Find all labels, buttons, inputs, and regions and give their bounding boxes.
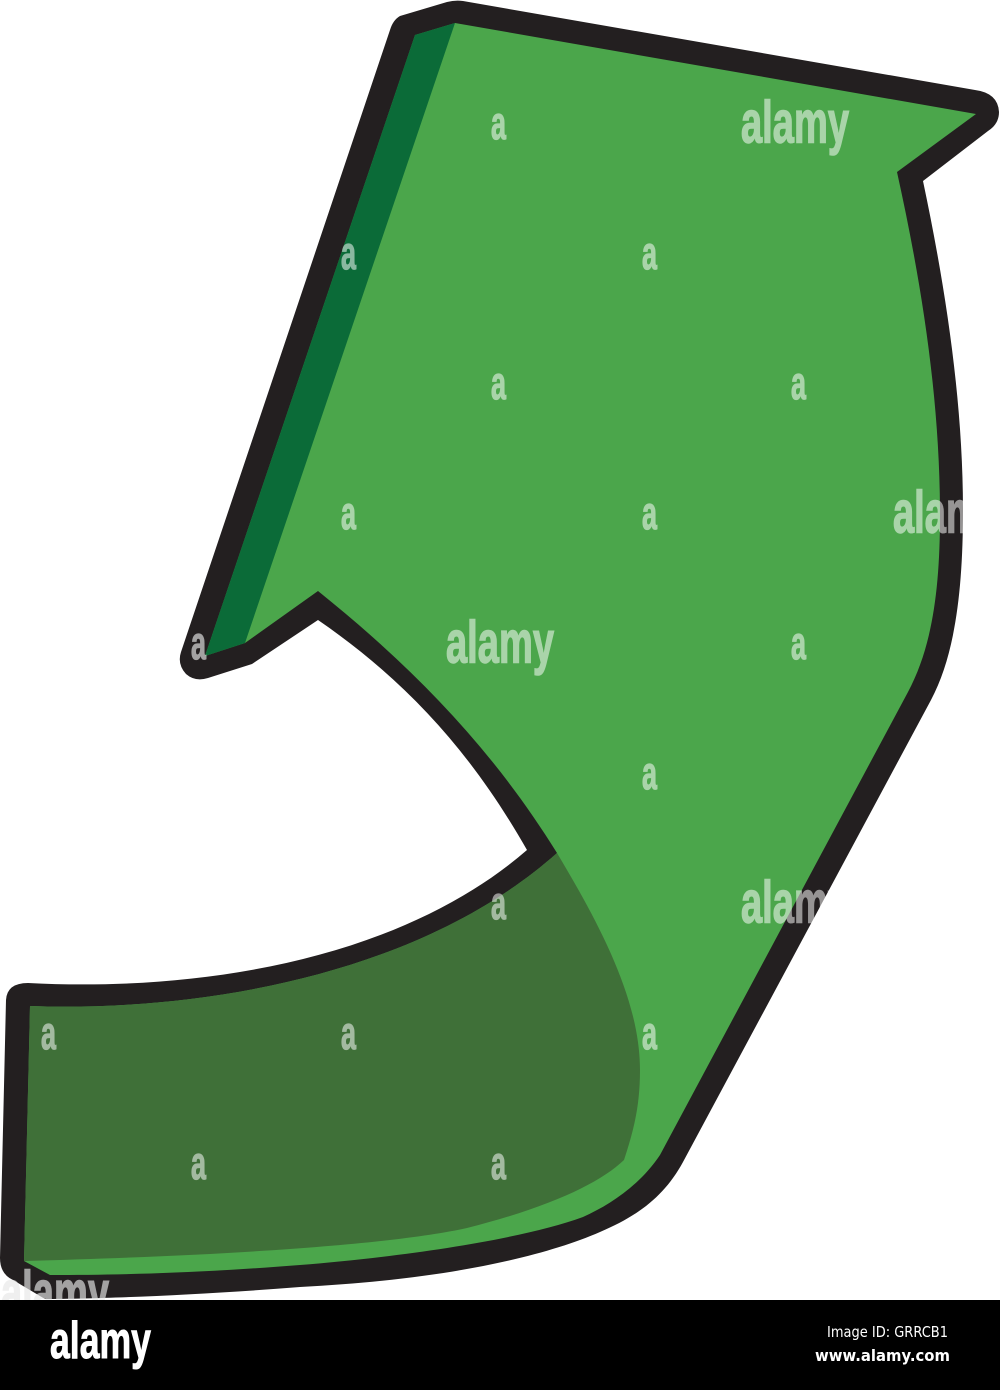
watermark: alamy text repeated: alamy [1,1260,109,1326]
watermark: small a marks: a [191,617,206,669]
footer image id: Image ID: GRRCB1 [827,1323,948,1341]
watermark: small a marks: a [791,357,806,409]
watermark: small a marks: a [642,227,657,279]
watermark: small a marks: a [491,97,506,149]
watermark: small a marks: a [642,487,657,539]
watermark: small a marks: a [491,357,506,409]
watermark: small a marks [41,97,806,1189]
watermark: small a marks: a [791,617,806,669]
footer logo text: alamy [50,1312,151,1370]
watermark: small a marks: a [491,877,506,929]
watermark: alamy text repeated: alamy [741,90,849,156]
watermark: small a marks: a [341,1007,356,1059]
footer bar [0,1300,1000,1390]
watermark: small a marks: a [642,747,657,799]
watermark: small a marks: a [41,1007,56,1059]
arrow tail shade [24,853,640,1261]
arrow side shade [205,23,455,656]
footer url: www.alamy.com [815,1346,950,1365]
watermark: small a marks: a [341,227,356,279]
watermark: alamy text repeated: alamy [446,610,554,676]
watermark: small a marks: a [191,1137,206,1189]
watermark: small a marks: a [491,1137,506,1189]
watermark: alamy text repeated: alamy [741,870,849,936]
watermark: small a marks: a [642,1007,657,1059]
watermark: small a marks: a [341,487,356,539]
